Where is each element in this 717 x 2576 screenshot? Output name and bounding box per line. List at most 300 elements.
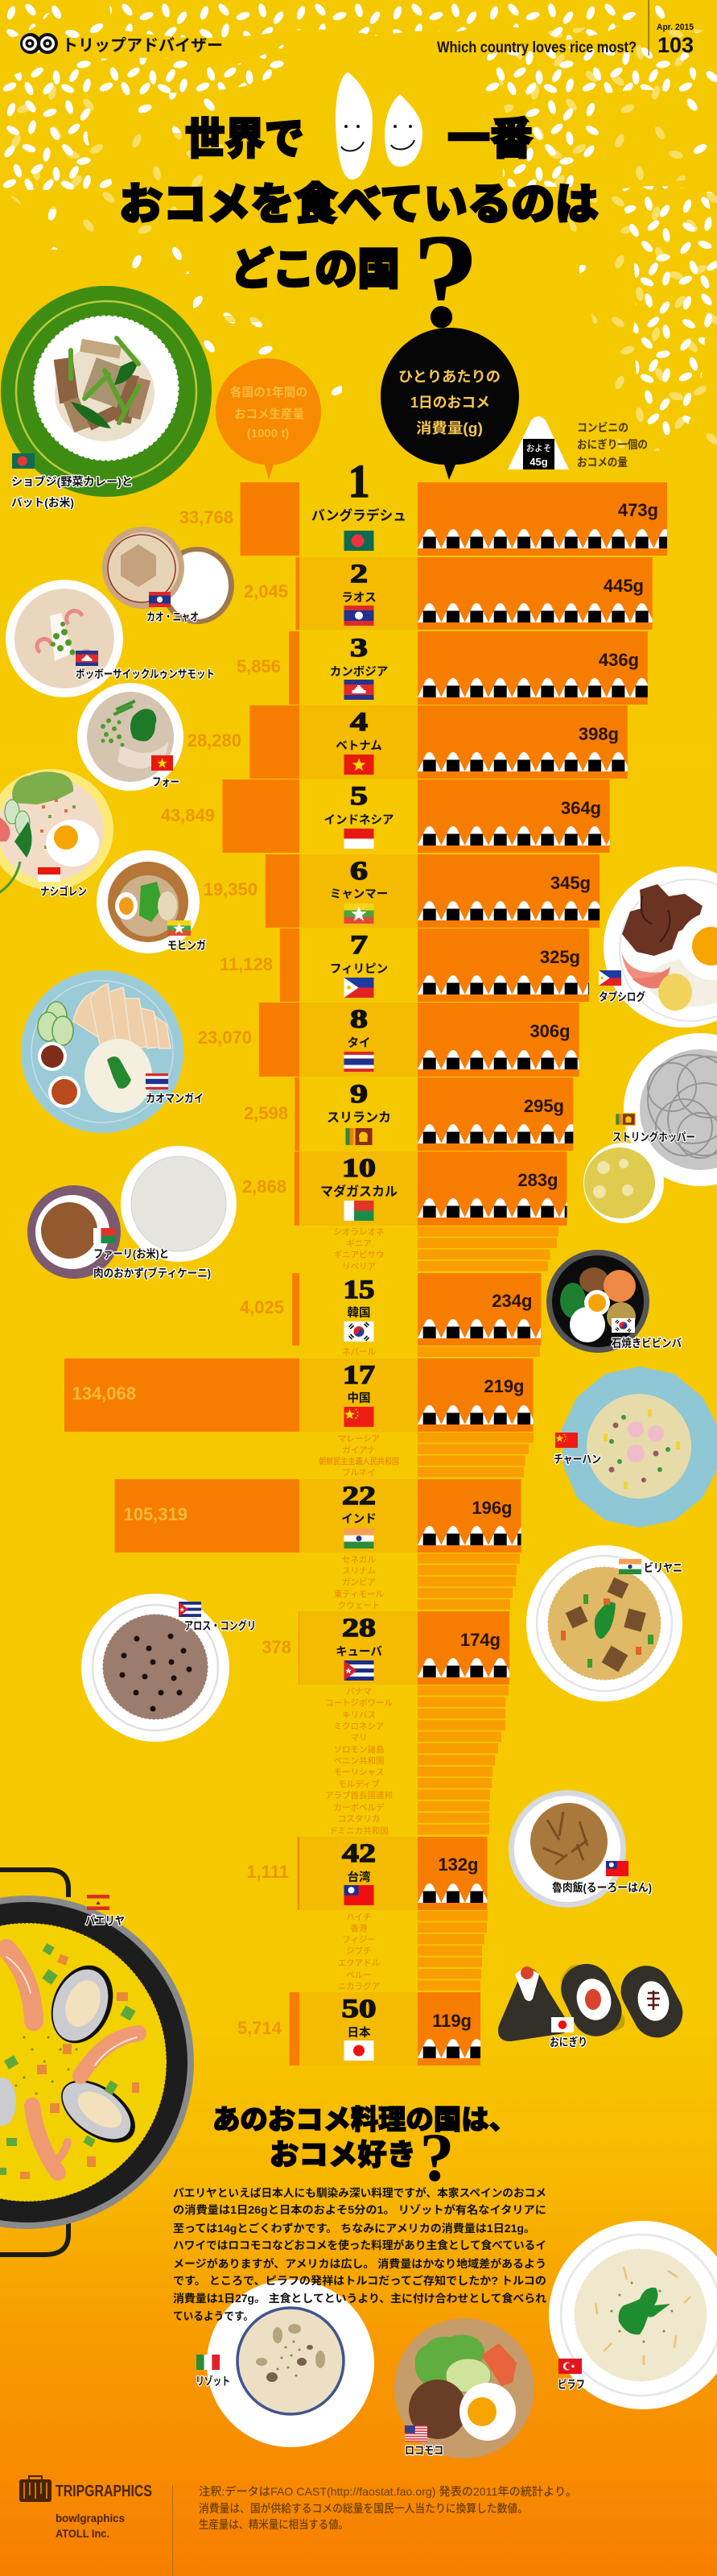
- production value: 11,128: [220, 954, 273, 974]
- flag: Indonesia: [38, 867, 60, 882]
- production value: 19,350: [204, 879, 258, 899]
- onigiri row: [418, 528, 667, 548]
- onigiri row: [418, 1123, 573, 1143]
- minor rows: ranks 11-14: シオラレオネ: [333, 1227, 385, 1237]
- minor rows: ranks 29-41: カーボベルデ: [333, 1802, 385, 1813]
- flag: [344, 1321, 373, 1342]
- brand name: トリップアドバイザー: [62, 36, 223, 55]
- production bar: [115, 1479, 299, 1553]
- production bar: [298, 1837, 299, 1910]
- flag: Spain: [87, 1895, 109, 1910]
- consumption bar: [418, 1992, 480, 2065]
- onigiri row: [418, 1404, 533, 1424]
- flag: Taiwan: [606, 1861, 628, 1876]
- minor rows: ranks 11-14: [333, 1226, 558, 1271]
- label: nasi goreng: ナシゴレン: [40, 885, 87, 898]
- flag: Bangladesh: [12, 453, 35, 469]
- flag: [344, 978, 373, 998]
- rank: 1: [348, 455, 370, 507]
- row: rank 8 Thailand: [198, 1003, 579, 1077]
- legend: onigiri 45g: [508, 416, 648, 469]
- onigiri row: [418, 1197, 567, 1218]
- consumption value: 234g: [492, 1291, 532, 1311]
- dish: tapsilog (Philippines): [604, 866, 717, 1028]
- title line 1 continued: 一番: [447, 115, 533, 163]
- minor rows: ranks 29-41: キリバス: [342, 1710, 376, 1720]
- consumption value: 306g: [530, 1021, 571, 1041]
- consumption bar: [418, 779, 610, 853]
- minor rows: ranks 11-14: リベリア: [342, 1262, 376, 1271]
- body text: [173, 2186, 547, 2322]
- onigiri row: [418, 1049, 579, 1069]
- minor rows: ranks 29-41: パナマ: [346, 1687, 372, 1697]
- flag: [344, 1201, 373, 1221]
- row: rank 22 India: [115, 1479, 521, 1553]
- dish: khao man gai (Thailand): [21, 970, 183, 1133]
- bubble: consumption: 消費量(g): [416, 420, 483, 436]
- scattered pale rice background: [0, 26, 717, 451]
- consumption value: 119g: [432, 2011, 472, 2031]
- consumption value: 436g: [599, 650, 639, 670]
- heading: section two: おコメ好き: [270, 2138, 416, 2171]
- big question mark: ?: [412, 206, 480, 356]
- production bar: [249, 705, 299, 779]
- bubble: consumption: ひとりあたりの: [398, 369, 501, 385]
- production bar: [290, 1992, 299, 2065]
- rank: 5: [350, 782, 368, 811]
- flag: [344, 903, 373, 924]
- dish: pilaf (Turkey): [549, 2221, 717, 2409]
- onigiri row: [418, 602, 653, 622]
- dish: nasi goreng (Indonesia): [0, 769, 113, 894]
- minor rows: ranks 29-41: ベニン共和国: [333, 1755, 385, 1766]
- country name: インドネシア: [323, 813, 394, 827]
- country name: キューバ: [336, 1646, 382, 1659]
- body text: ハワイではロコモコなどおコメを使った料理があり主食として食べているイ: [173, 2239, 546, 2251]
- onigiri row: [418, 974, 589, 994]
- flag: [344, 531, 373, 551]
- bubble: consumption: [381, 328, 519, 480]
- label: vary: 肉のおかず(ブティケーニ): [93, 1267, 211, 1280]
- label: pilaf: ピラフ: [558, 2378, 585, 2391]
- flag: [344, 829, 373, 849]
- minor rows: ranks 23-27: セネガル: [342, 1555, 376, 1565]
- icon: onigiri: およそ: [526, 444, 551, 453]
- consumption bar: [418, 1003, 579, 1077]
- production bar: [64, 1358, 299, 1432]
- title line 2: おコメを食べているのは: [119, 180, 599, 229]
- row: rank 7 Philippines: [220, 928, 589, 1002]
- label: bibimbap: 石焼きビビンバ: [612, 1337, 682, 1350]
- label: khao niao: カオ・ニャオ: [146, 610, 199, 623]
- production bar: [296, 557, 299, 630]
- onigiri row: [418, 1657, 509, 1677]
- body text: 消費量は1日27g。 主食としてというより、主に付け合わせとして食べられ: [173, 2292, 547, 2305]
- minor rows: ranks 23-27: クウェート: [338, 1601, 380, 1611]
- icon: owl: [20, 33, 58, 54]
- onigiri row: [418, 1525, 521, 1545]
- flag: [344, 1528, 373, 1548]
- dish: arroz congri (Cuba): [81, 1594, 229, 1742]
- row: rank 2 Laos: [244, 557, 653, 630]
- minor rows: ranks 18-21: ブルネイ: [342, 1467, 376, 1478]
- mussels: [0, 1956, 146, 2155]
- row: rank 5 Indonesia: [161, 779, 610, 853]
- row: rank 3 Cambodia: [237, 631, 648, 705]
- logo: Tripgraphics: ATOLL Inc.: [56, 2527, 109, 2540]
- flag: Myanmar: [167, 920, 191, 936]
- flag: [344, 606, 373, 626]
- legend text: [577, 421, 648, 469]
- row: rank 10 Madagascar: [242, 1152, 567, 1226]
- minor rows: ranks 43-49: [338, 1911, 488, 1991]
- production value: 105,319: [123, 1504, 187, 1524]
- brand name: TRIPGRAPHICS: [56, 2483, 152, 2500]
- bubble: production: 各国の1年間の: [230, 385, 307, 399]
- minor rows: ranks 29-41: マリ: [351, 1733, 367, 1743]
- icon: onigiri: [508, 416, 569, 469]
- label: paella: パエリヤ: [85, 1914, 125, 1927]
- production value: 1,111: [246, 1862, 289, 1882]
- heading: section two: あのおコメ料理の国は、: [212, 2105, 517, 2136]
- label: pho: フォー: [152, 775, 179, 788]
- label: khao man gai: カオマンガイ: [146, 1092, 204, 1105]
- minor rows: ranks 29-41: ソロモン諸島: [333, 1744, 385, 1755]
- consumption value: 196g: [472, 1498, 512, 1518]
- rank: 10: [342, 1154, 376, 1183]
- label: vary: [93, 1247, 211, 1280]
- minor rows: ranks 29-41: モルディブ: [338, 1779, 380, 1789]
- rank: 9: [350, 1080, 368, 1109]
- rank: 22: [342, 1482, 376, 1511]
- country name: カンボジア: [330, 665, 388, 679]
- minor rows: ranks 43-49: ハイチ: [346, 1912, 372, 1922]
- flag: Madagascar: [93, 1228, 116, 1243]
- flag: Thailand: [146, 1073, 168, 1090]
- consumption bar: [418, 1358, 533, 1432]
- row: rank 42 Taiwan: [246, 1837, 488, 1910]
- label: vary: ファーリ(お米)と: [93, 1247, 169, 1260]
- row: rank 15 Korea: [240, 1273, 541, 1346]
- flag: India: [619, 1559, 641, 1574]
- row: rank 17 China: [64, 1358, 533, 1432]
- body text: ているようです。: [173, 2310, 253, 2322]
- consumption bar: [418, 928, 589, 1002]
- consumption bar: [418, 854, 600, 928]
- rank: 28: [342, 1614, 376, 1643]
- row: rank 1 Bangladesh: [179, 455, 667, 556]
- minor row: rank 16: [342, 1346, 540, 1357]
- production value: 378: [262, 1637, 291, 1657]
- header: issue: 103: [657, 33, 694, 57]
- minor rows: ranks 43-49: ニカラグア: [338, 1981, 380, 1991]
- country name: スリランカ: [327, 1110, 391, 1125]
- flag: [344, 1127, 373, 1147]
- minor rows: ranks 18-21: [319, 1433, 534, 1478]
- body text: メージがありますが、アメリカは広し。 消費量はかなり地域差があるよう: [173, 2257, 546, 2270]
- header: issue: [649, 0, 694, 57]
- rank: 15: [343, 1276, 375, 1305]
- onigiri row: [418, 900, 600, 920]
- label: shobuji: [11, 475, 133, 509]
- country name: 台湾: [348, 1870, 371, 1884]
- country name: 日本: [348, 2026, 371, 2040]
- rank: 8: [350, 1005, 368, 1034]
- bubble: production: おコメ生産量: [234, 407, 304, 421]
- dish: mohinga (Myanmar): [97, 850, 200, 953]
- label: shobuji: ショブジ(野菜カレー)と: [11, 475, 133, 488]
- consumption value: 364g: [561, 798, 601, 818]
- rank: 42: [342, 1839, 376, 1868]
- production value: 2,598: [244, 1103, 288, 1123]
- dish: bobor (Cambodia): [6, 580, 123, 697]
- country name: ミャンマー: [330, 888, 388, 901]
- flag: Korea: [612, 1318, 635, 1333]
- consumption value: 445g: [604, 576, 644, 596]
- onigiri row: [418, 2038, 480, 2058]
- minor rows: ranks 29-41: コートジボワール: [325, 1698, 393, 1708]
- title: [119, 72, 599, 356]
- production value: 23,070: [198, 1028, 252, 1048]
- rank: 50: [341, 1995, 377, 2024]
- dish: shobuji and bhat (Bangladesh): [1, 286, 212, 497]
- footnote: 生産量は、精米量に相当する値。: [199, 2518, 348, 2531]
- production bar: [280, 928, 299, 1002]
- production value: 33,768: [179, 507, 233, 527]
- consumption bar: [418, 1837, 488, 1910]
- flag: [344, 1407, 373, 1427]
- production bar: [289, 631, 299, 705]
- production value: 2,868: [242, 1176, 286, 1197]
- icon: suitcase: [19, 2476, 52, 2502]
- production value: 2,045: [244, 581, 288, 602]
- minor rows: ranks 23-27: [334, 1553, 520, 1611]
- minor rows: ranks 23-27: ガンビア: [342, 1577, 376, 1587]
- flag: Cambodia: [76, 651, 98, 666]
- legend text: コンビニの: [577, 421, 628, 434]
- rank: 3: [350, 634, 368, 663]
- flag: Cuba: [179, 1602, 201, 1617]
- label: arroz congri: アロス・コングリ: [184, 1619, 256, 1632]
- row: rank 50 Japan: [237, 1992, 480, 2065]
- flag: Italy: [196, 2355, 220, 2370]
- vegetables: [0, 1943, 139, 2179]
- rank: 2: [350, 560, 368, 589]
- minor rows: ranks 29-41: [325, 1685, 509, 1836]
- production value: 5,856: [237, 656, 281, 676]
- production bar: [259, 1003, 299, 1077]
- production bar: [266, 854, 299, 928]
- onigiri row: [418, 1883, 488, 1903]
- consumption bar: [418, 1152, 567, 1226]
- minor rows: ranks 43-49: ジブチ: [346, 1945, 372, 1956]
- flag: [344, 680, 373, 700]
- label: fried rice: チャーハン: [554, 1453, 601, 1466]
- minor rows: ranks 29-41: モーリシャス: [333, 1768, 385, 1777]
- row: rank 4 Vietnam: [187, 705, 628, 779]
- consumption value: 325g: [540, 947, 580, 967]
- consumption bar: [418, 1611, 509, 1685]
- minor rows: ranks 18-21: マレーシア: [338, 1434, 380, 1444]
- olive rice specks: [14, 2036, 77, 2095]
- consumption bar: [418, 1273, 541, 1346]
- row: rank 28 Cuba: [262, 1611, 509, 1685]
- label: mohinga: モヒンガ: [167, 939, 206, 952]
- flag: Philippines: [599, 970, 621, 986]
- country name: マダガスカル: [320, 1184, 398, 1199]
- dish: fried rice (China): [562, 1367, 717, 1528]
- consumption bar: [418, 1077, 573, 1151]
- rank: 17: [343, 1361, 375, 1390]
- consumption value: 283g: [517, 1170, 558, 1190]
- country name: バングラデシュ: [311, 507, 406, 523]
- consumption value: 295g: [524, 1096, 564, 1116]
- flag: Vietnam: [151, 755, 173, 771]
- consumption value: 219g: [484, 1376, 525, 1396]
- country name: ベトナム: [336, 739, 382, 753]
- consumption value: 345g: [550, 873, 591, 893]
- minor rows: ranks 43-49: 香港: [351, 1923, 368, 1933]
- flag: [344, 2041, 373, 2061]
- dish: khao niao (Laos): [102, 527, 234, 624]
- label: string hoppers: ストリングホッパー: [612, 1131, 695, 1143]
- production bar: [222, 779, 299, 853]
- flag: [344, 1660, 373, 1681]
- country name: 中国: [348, 1391, 370, 1405]
- logo: Tripgraphics: [19, 2476, 152, 2540]
- production bar: [295, 1152, 299, 1226]
- consumption bar: [418, 705, 628, 779]
- question mark: ?: [420, 2119, 454, 2196]
- shrimps: [6, 1949, 138, 2173]
- footnote: 消費量は、国が供給するコメの総量を国民一人当たりに換算した数値。: [199, 2502, 528, 2515]
- icon: smiling rice characters: [336, 72, 422, 180]
- dish: pho (Vietnam): [77, 683, 183, 791]
- flag: Sri Lanka: [615, 1113, 636, 1126]
- panel: darker centre strips on alternating rows: [299, 557, 418, 2065]
- minor rows: ranks 23-27: スリナム: [342, 1566, 376, 1576]
- production bar: [292, 1273, 299, 1346]
- dish: biryani (India): [526, 1545, 682, 1701]
- dish: onigiri (Japan): [498, 1956, 691, 2046]
- label: lu rou fan: 魯肉飯(るーろーはん): [552, 1881, 652, 1894]
- production value: 43,849: [161, 805, 215, 825]
- rank: 4: [350, 708, 368, 737]
- consumption value: 398g: [579, 724, 619, 744]
- flag: China: [555, 1433, 578, 1448]
- production bar: [298, 1611, 300, 1685]
- consumption bar: [418, 631, 648, 705]
- onigiri row: [418, 751, 628, 771]
- country name: 韓国: [348, 1305, 370, 1320]
- footnote: [199, 2485, 577, 2531]
- consumption value: 132g: [438, 1854, 478, 1875]
- body text: パエリヤといえば日本人にも馴染み深い料理ですが、本家スペインのおコメ: [173, 2186, 546, 2199]
- pan handles: [0, 1870, 68, 2255]
- icon: onigiri: 45g: [530, 456, 548, 468]
- bubble: production: [216, 358, 321, 480]
- country name: ラオス: [341, 591, 377, 605]
- country name: タイ: [348, 1036, 370, 1050]
- row: rank 6 Myanmar: [204, 854, 600, 928]
- title line 1: 世界で: [185, 115, 304, 163]
- logo: TripAdvisor: [20, 33, 223, 55]
- title line 3: どこの国: [231, 246, 400, 294]
- country name: インド: [341, 1513, 377, 1526]
- rank: 7: [350, 931, 368, 960]
- flag: [344, 1885, 373, 1905]
- flag: USA: [405, 2425, 427, 2442]
- dish: bibimbap (Korea): [546, 1250, 649, 1353]
- minor rows: ranks 18-21: ガイアナ: [342, 1445, 376, 1455]
- flag: Laos: [149, 592, 171, 607]
- minor rows: ranks 29-41: アラブ首長国連邦: [325, 1790, 393, 1801]
- onigiri row: [418, 677, 648, 697]
- minor rows: ranks 18-21: 朝鮮民主主義人民共和国: [319, 1456, 399, 1466]
- dish: loco moco (USA): [394, 2318, 534, 2458]
- label: bobor: ボッボーサイックルゥンサモット: [76, 668, 215, 680]
- body text: の消費量は1日26gと日本のおよそ5分の1。 リゾットが有名なイタリアに: [173, 2203, 546, 2216]
- row: rank 9 Sri Lanka: [244, 1077, 573, 1151]
- footnote: 注釈:データはFAO CAST(http://faostat.fao.org) 発表の2011年の統計より。: [199, 2485, 577, 2498]
- header: tagline: Which country loves rice most?: [437, 39, 637, 56]
- bubble: production: (1000 t): [247, 427, 289, 440]
- flag: Turkey: [558, 2359, 582, 2374]
- production bar: [295, 1077, 299, 1151]
- label: tapsilog: タプシログ: [599, 990, 645, 1003]
- consumption bar: [418, 557, 653, 630]
- dish: paella (Spain): [0, 1870, 194, 2255]
- label: shobuji: バット(お米): [11, 496, 74, 509]
- flag: [344, 755, 373, 775]
- credits: bowlgraphics: [56, 2512, 125, 2524]
- dish: vary and voanjobory (Madagascar): [27, 1146, 237, 1279]
- consumption bar: [418, 1479, 521, 1553]
- production value: 28,280: [187, 730, 241, 750]
- minor rows: ranks 11-14: ギニア: [346, 1238, 372, 1248]
- production value: 134,068: [72, 1383, 136, 1404]
- minor row: rank 16: ネパール: [342, 1347, 376, 1357]
- label: risotto: リゾット: [196, 2375, 230, 2388]
- legend text: おにぎり一個の: [577, 438, 648, 451]
- country name: フィリピン: [330, 962, 388, 976]
- minor rows: ranks 43-49: ペルー: [346, 1970, 372, 1980]
- minor rows: ranks 43-49: フィジー: [342, 1935, 376, 1945]
- header: issue: Apr. 2015: [657, 23, 694, 32]
- label: biryani: ビリヤニ: [644, 1561, 682, 1574]
- flag: [344, 1052, 373, 1072]
- body text: 至っては14gとごくわずかです。 ちなみにアメリカの消費量は1日21g。: [173, 2222, 535, 2235]
- onigiri row: [418, 825, 610, 846]
- production value: 5,714: [237, 2018, 282, 2038]
- bubble: consumption: 1日のおコメ: [410, 395, 490, 411]
- body text: です。 ところで、ピラフの発祥はトルコだってご存知でしたか? トルコの: [173, 2274, 546, 2287]
- minor rows: ranks 29-41: ドミニカ共和国: [329, 1826, 389, 1836]
- minor rows: ranks 23-27: 東ティモール: [334, 1589, 385, 1599]
- production bar: [240, 482, 299, 556]
- onigiri row: [418, 1318, 541, 1338]
- flag: Japan: [551, 2017, 574, 2032]
- minor rows: ranks 29-41: ミクロネシア: [333, 1722, 385, 1731]
- label: loco moco: ロコモコ: [405, 2444, 443, 2457]
- consumption value: 473g: [618, 500, 658, 520]
- label: onigiri: おにぎり: [550, 2036, 587, 2049]
- dish: lu rou fan (Taiwan): [509, 1790, 626, 1908]
- heading: section two: [212, 2105, 517, 2196]
- scattered white rice grains: [0, 0, 717, 435]
- dish: risotto (Italy): [207, 2280, 374, 2447]
- minor rows: ranks 11-14: ギニアビサウ: [333, 1250, 385, 1260]
